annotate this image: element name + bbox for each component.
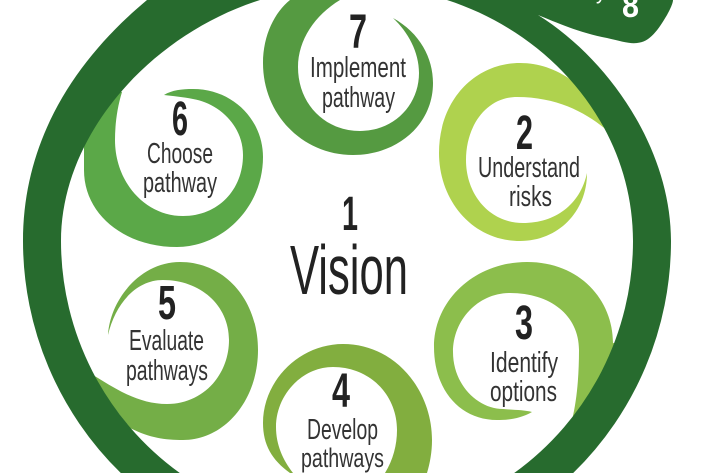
label: Identify options: Identify (490, 347, 558, 379)
label: Evaluate pathways: Evaluate (129, 325, 204, 357)
step 7: implement pathway (263, 0, 433, 155)
number 6: 6 (172, 93, 188, 146)
step 4: develop pathways (263, 344, 432, 473)
label: Vision: Vision (290, 231, 408, 309)
swirl 4 (263, 344, 432, 473)
swirl 2 (439, 63, 625, 241)
swirl 5 (85, 262, 258, 440)
step 2: understand risks (439, 63, 625, 241)
number 2: 2 (516, 107, 533, 160)
swirl 7 (263, 0, 433, 155)
swirl 6 (84, 85, 263, 247)
centre: vision (290, 188, 408, 309)
label: Understand risks: risks (509, 181, 552, 213)
label: Implement pathway: Implement (310, 52, 406, 84)
label: Identify options (490, 347, 558, 408)
number 5: 5 (158, 277, 176, 330)
number 7: 7 (349, 6, 367, 59)
label: Develop pathways: pathways (301, 443, 384, 473)
step 5: evaluate pathways (85, 262, 258, 440)
number 4: 4 (332, 365, 350, 418)
swirl 3 (434, 262, 640, 425)
step 3: identify options (434, 262, 640, 425)
number 3: 3 (515, 297, 533, 350)
label: Implement pathway: pathway (322, 82, 395, 114)
label: Understand risks (478, 152, 580, 213)
label: Develop pathways (301, 414, 384, 473)
label: Evaluate pathways (126, 325, 208, 387)
label: Choose pathway: Choose (147, 138, 213, 170)
label: Identify options: options (490, 376, 557, 408)
label: Choose pathway (143, 138, 217, 199)
step 6: choose pathway (84, 85, 263, 247)
label: Choose pathway: pathway (143, 167, 217, 199)
label: Develop pathways: Develop (307, 414, 378, 446)
number 1: 1 (342, 188, 358, 241)
label: Evaluate pathways: pathways (126, 355, 208, 387)
label: Understand risks: Understand (478, 152, 580, 184)
label: Implement pathway (310, 52, 406, 114)
